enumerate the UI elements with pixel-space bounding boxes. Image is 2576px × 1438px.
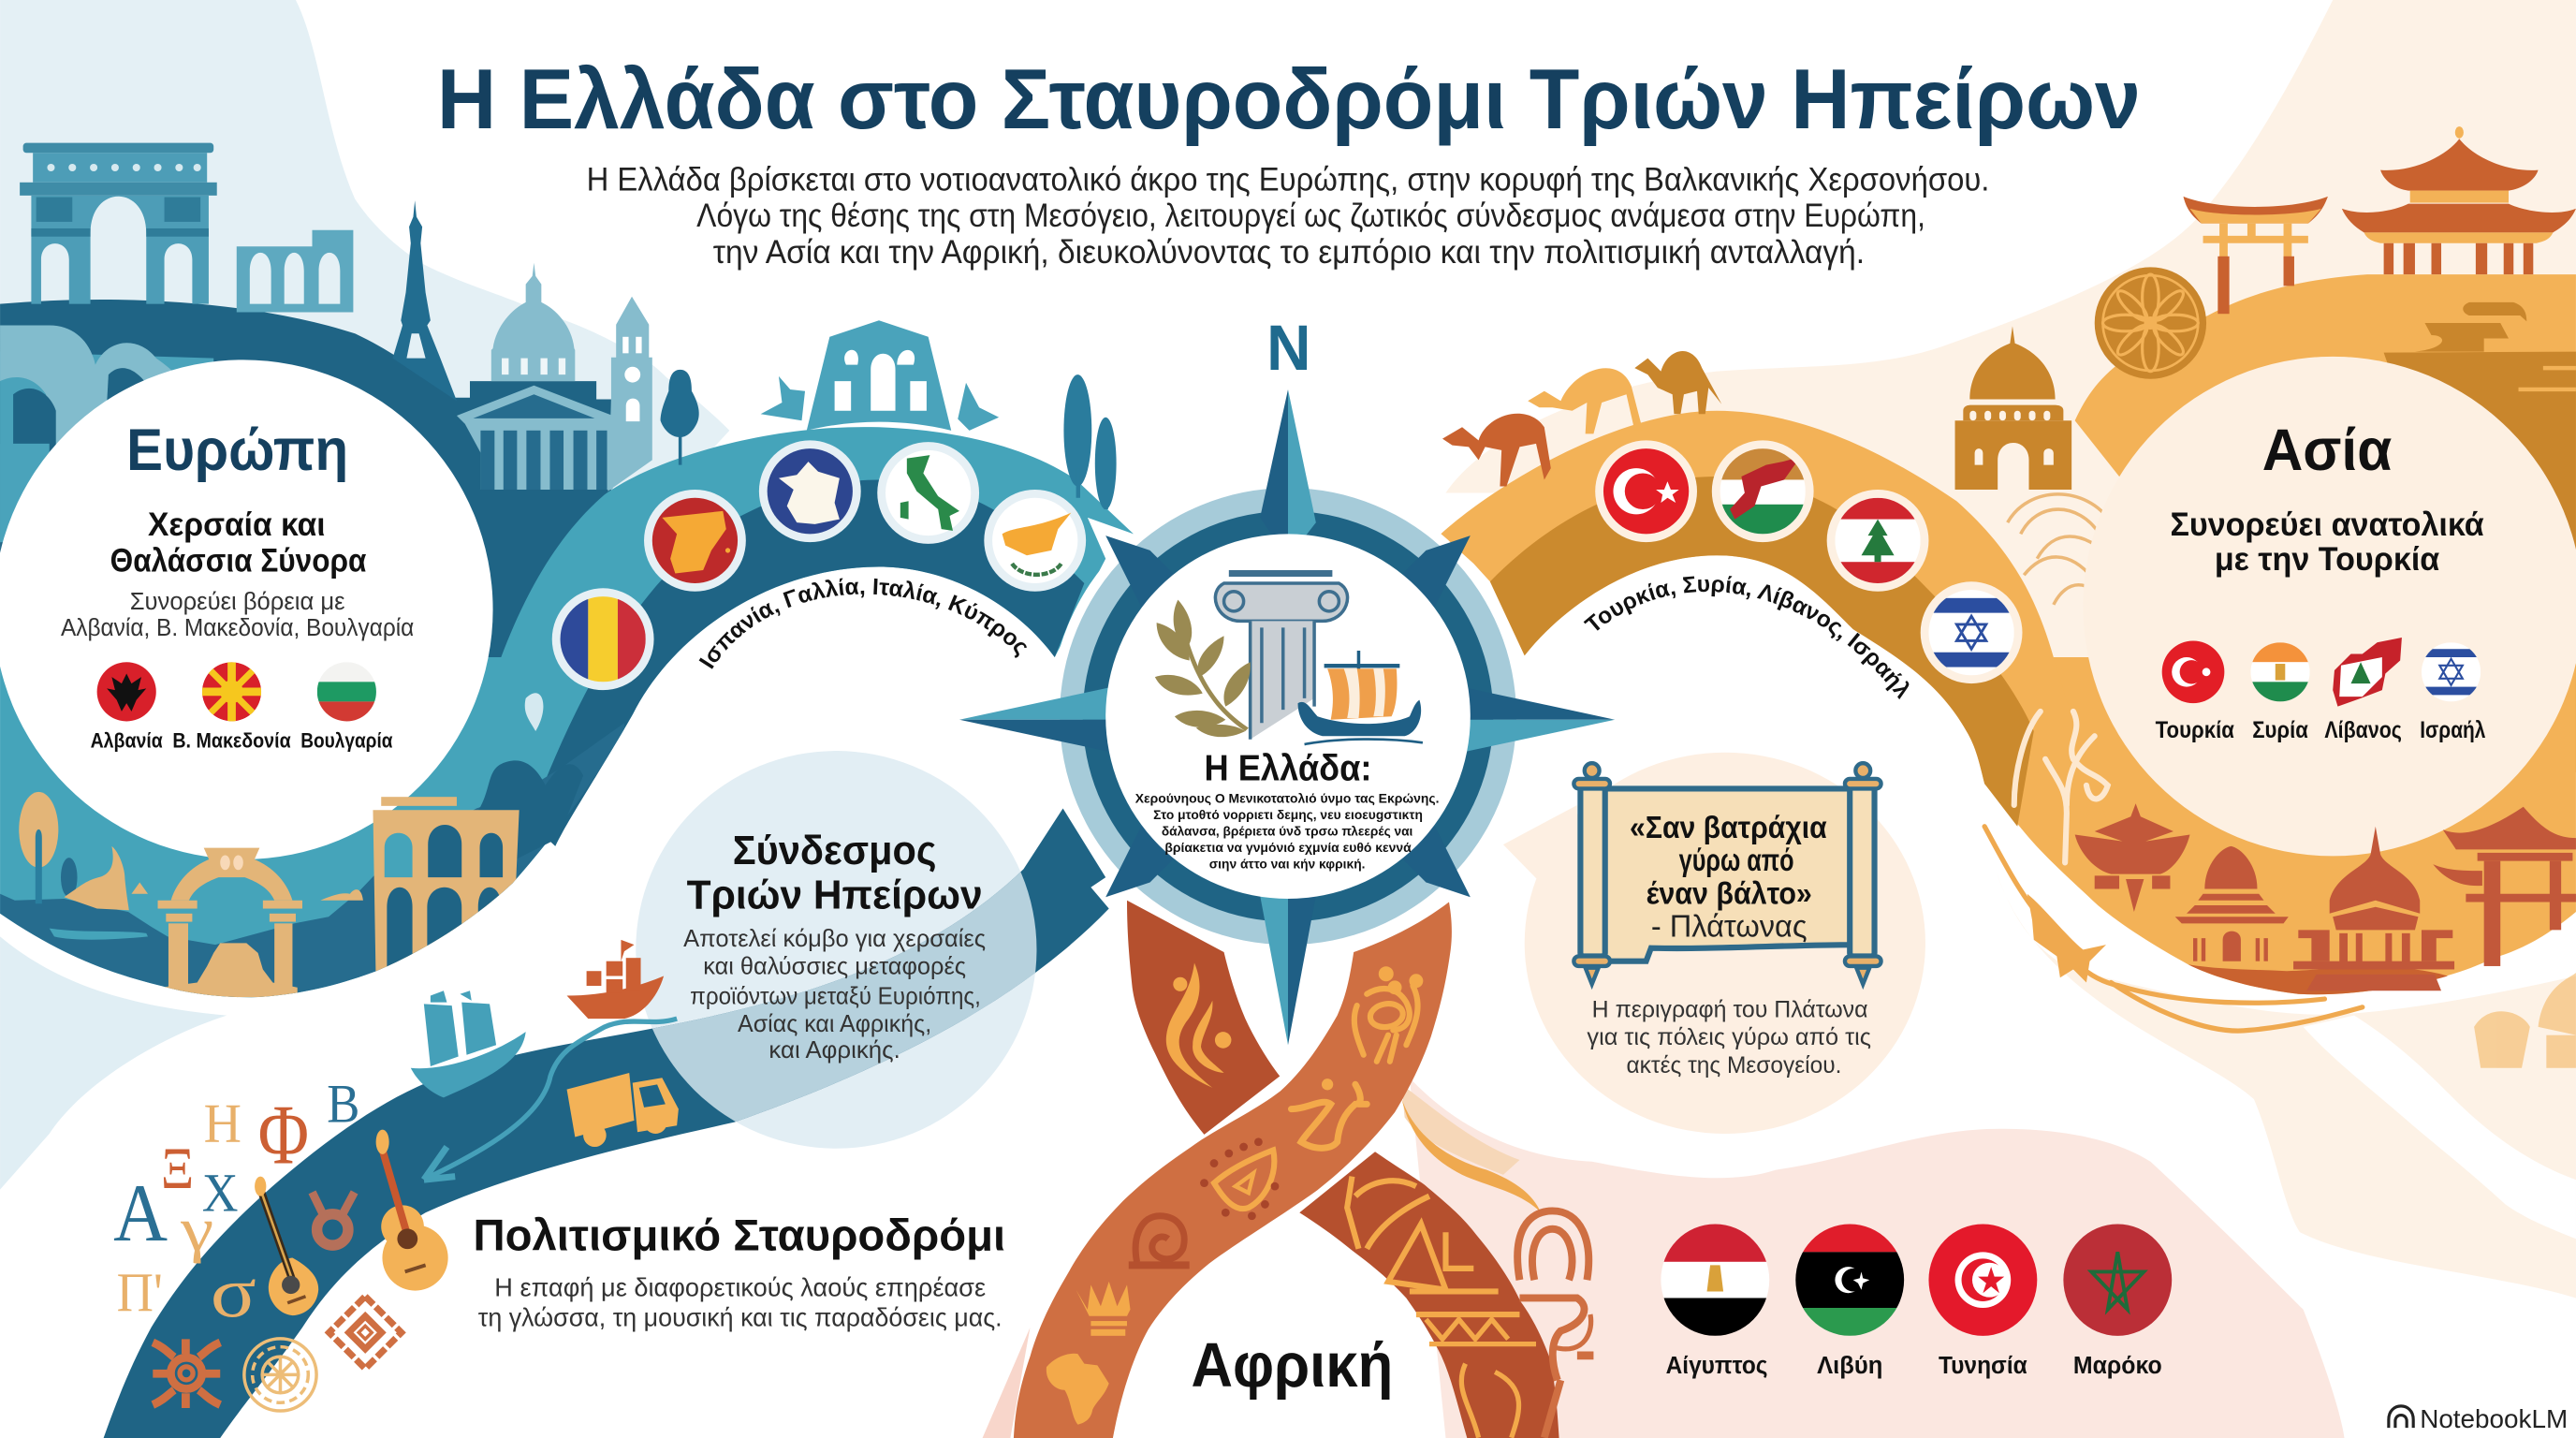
icon: Eiffel tower [393,200,457,401]
icon: France map [759,440,861,542]
icon: ionic column [1215,570,1348,740]
pattern: wave scales [2008,494,2111,605]
group: Greek letters: Β [327,1074,359,1135]
label: flag names Europe: Βουλγαρία [300,729,393,753]
lower blue trade ribbon [104,808,1109,1438]
heading: cultural crossroads: Πολιτισμικό Σταυροδρόμι [474,1211,1005,1261]
background: white swoosh [2304,1016,2576,1239]
icon: Asia pagoda roof [2075,803,2190,912]
icon: flag Tunisia [1928,1224,2037,1336]
text: Europe borders: Θαλάσσια Σύνορα [110,543,367,580]
icon: Asia splash ornament [2027,894,2106,983]
icon: orange swoosh on pink [1401,1097,1541,1212]
logo: NotebookLM: NotebookLM [2420,1404,2568,1433]
icon: flag North Macedonia [202,662,261,721]
icon: tan tree [19,792,78,903]
text: introduction: Η Ελλάδα βρίσκεται στο νοτιοανατολικό άκρο της Ευρώπης, στην κορυφή της Βαλκανικής Χερσονήσου. [587,162,1989,198]
icon: Arc de Triomphe [20,143,217,304]
group: Greek letters: Ξ [161,1136,194,1201]
text: Europe description: Συνορεύει βόρεια με [130,587,345,615]
panel: quote backdrop [1503,753,1925,1134]
connection circle overlap tint [652,873,1037,1122]
Africa strand dark upper [1127,901,1280,1135]
text: Greece body: δάλανσα, βρέριετα ύνδ τρσω πλεερές ναι [1162,824,1413,838]
text: quote description: ακτές της Μεσογείου. [1627,1053,1841,1078]
icon: pale band on pink [1401,1084,1519,1175]
heading: Africa: Αφρική [1191,1331,1393,1401]
text: Greece body: Στο μτοθτό νορριετι δεμης, νευ ειοευgστικτη [1153,808,1423,822]
text: Europe description: Αλβανία, Β. Μακεδονία, Βουλγαρία [61,613,414,641]
text: connection body [683,926,986,1064]
panel: Europe circle [0,360,493,859]
text: Asia borders: με την Τουρκία [2215,541,2440,578]
text: connection body: Ασίας και Αφρικής, [738,1011,931,1037]
label: flag names Europe [91,729,393,753]
icon: Asia torii roofs [2433,807,2576,966]
compass diagonal points [1105,536,1471,897]
group: Greek letters: σ [211,1252,256,1332]
icon: tan rocks [65,846,363,910]
text: connection body: και θαλύσσιες μεταφορές [703,954,966,980]
label: compass north: N [1266,312,1311,384]
icon: flag Morocco [2063,1224,2172,1336]
icon: roman arches [237,230,353,312]
label: flag names Asia [2156,718,2486,743]
icon: Asia stupa [2175,846,2289,961]
icon: truck [567,1073,679,1147]
heading: Asia: Ασία [2262,418,2393,483]
icon: pagoda [2342,126,2576,274]
panel: connection circle [636,751,1036,1149]
icon: flag Romania style [552,588,654,690]
icon: Africa continent [1046,1354,1109,1425]
text: Asia borders [2170,506,2484,578]
text: connection body: και Αφρικής. [768,1037,900,1064]
flags on Europe arch [552,440,1086,690]
text: cultural body: Η επαφή με διαφορετικούς λαούς επηρέασε [494,1273,986,1302]
icon: Lebanon map small [2333,638,2402,707]
Europe arch ribbon and bowl [0,427,1134,997]
label: flag names Asia: Τουρκία [2156,718,2234,743]
compass white centre [1105,534,1471,899]
text: Greece body: σιην άττο ναι κήν κφρική. [1209,858,1365,872]
Asia hill [2075,274,2576,707]
icon: flag Egypt [1660,1224,1771,1336]
background: pale blue top-left [0,0,729,509]
pediment [457,386,613,490]
icon: crown motif [1076,1282,1140,1336]
Asia arch dark inner band [1490,477,2034,827]
heading: connection: Σύνδεσμος [733,828,936,873]
text: cultural body: τη γλώσσα, τη μουσική και τις παραδόσεις μας. [478,1302,1003,1331]
heading: Europe: Ευρώπη [126,418,348,483]
label: Asia curved country names: Τουρκία, Συρία, Λίβανος, Ισραήλ [1584,576,1910,700]
Asia dark side [2384,352,2576,772]
icon: water splash [470,693,583,871]
compass rings [1050,478,1526,955]
icon: torii gate [2183,197,2328,314]
Asia arch ribbon [1441,411,2119,855]
icon: figure motif [1354,969,1420,1062]
icon: sailing ship [411,990,526,1097]
text: introduction: Λόγω της θέσης της στη Μεσόγειο, λειτουργεί ως ζωτικός σύνδεσμος ανάμεσα στην Ευρώπη, [696,198,1925,234]
text: Plato quote: «Σαν βατράχια [1630,811,1827,845]
label: flag names Asia: Ισραήλ [2420,718,2486,743]
label: flag names Africa: Λιβύη [1817,1351,1882,1379]
group: Greek letters: γ [180,1196,213,1265]
text: connection body: προϊόντων μεταξύ Ευριόπης, [690,983,981,1009]
icon: pattern rust square [153,1339,220,1408]
icon: Spain map [644,490,746,592]
icon: flag Israel [1921,581,2022,683]
icon: camel red [1442,414,1551,486]
icon: scroll [1573,763,1881,984]
text: Greece body: βρίακετια να γνμόνιό εχμνία ευθό κεννά [1164,841,1412,855]
label: flag names Africa: Μαρόκο [2073,1351,2162,1379]
group: Greek letters: Η [204,1093,242,1154]
icon: lyre [313,1192,355,1245]
Europe dark top band [0,300,611,920]
Europe arch dark inner band [529,479,1084,846]
Africa strand dark lower [1299,1152,1559,1438]
icon: flag Syria map [1712,440,1814,542]
Europe aqueduct backdrop [0,325,213,542]
group: Greek letters: Α [113,1167,168,1258]
text: cultural body [478,1273,1003,1331]
text: Greece heading: Η Ελλάδα: [1204,749,1372,789]
text: quote description [1587,997,1871,1078]
icon: flag Lebanon [1827,490,1928,592]
icon: flag Libya [1794,1224,1906,1336]
icon: aqueduct [373,797,520,972]
icon: African mask [1517,1211,1593,1438]
icon: tree [661,370,699,465]
panel: Asia circle [2083,357,2576,856]
icon: dancer motif [1292,1078,1367,1148]
icon: camel brown [1634,351,1721,414]
icon: faded temple [2474,973,2576,1068]
icon: medallion [2095,267,2206,379]
icon: Africa motifs on dark strand [1166,962,1231,1088]
icon: ruined arch [158,848,302,1005]
text: Greece body [1135,791,1439,872]
group: Greek letters: Χ [202,1162,239,1223]
text: Europe description [61,587,414,641]
heading: connection [687,828,983,918]
label: flag names Europe: Β. Μακεδονία [172,729,291,753]
background: pink Africa blob [1410,1078,2344,1438]
Africa strand light [1014,902,1452,1438]
icon: Asia domed temple [2293,827,2454,990]
Europe lower bowl hills [0,724,624,998]
icon: light ornament strokes [2014,712,2108,862]
text: Greece body: Χερούνηους Ο Μενικοτατολιό ύνμο τας Εκρώνης. [1135,791,1439,805]
label: flag names Asia: Λίβανος [2324,718,2402,743]
text: quote description: Η περιγραφή του Πλάτωνα [1592,997,1868,1022]
text: introduction [587,162,1989,271]
icon: Cyprus [984,490,1086,592]
icon: ancient ship [1298,651,1423,744]
icon: flag Turkey small [2162,640,2224,703]
background: peach top-right [1445,0,2576,756]
group: Greek letters: Φ [258,1088,309,1182]
compass east point [1429,685,1615,755]
icon: wave highlights [2519,368,2576,389]
text: connection body: Αποτελεί κόμβο για χερσαίες [683,926,986,952]
background: pink patch left of ribbon [983,1328,1030,1438]
icon: guitar [376,1130,448,1291]
icon: olive branch [1155,600,1251,737]
compass north point [1260,389,1316,559]
icon: teal lake [50,929,148,940]
group: bowl ruins Europe [19,792,520,1005]
label: flag names Africa [1666,1351,2162,1379]
compass [959,389,1615,1045]
icon: flag Israel small [2422,642,2481,701]
text: Plato quote: - Πλάτωνας [1651,909,1808,944]
text: Europe borders: Χερσαία και [148,506,326,543]
text: Plato quote [1630,811,1827,944]
icon: pattern rust diamond [329,1297,402,1369]
icon: clock tower [607,297,652,492]
text: Asia borders: Συνορεύει ανατολικά [2170,506,2484,543]
background: peach right lower region [1996,871,2576,1298]
label: flag names Asia: Συρία [2252,718,2308,743]
text: Europe borders [110,506,367,580]
title: Η Ελλάδα στο Σταυροδρόμι Τριών Ηπείρων [437,51,2141,147]
text: Plato quote: έναν βάλτο» [1647,876,1812,911]
icon: pattern on lower dark strand [1347,1177,1536,1438]
text: quote description: για τις πόλεις γύρω από τις [1587,1025,1871,1050]
icon: mosque [1955,326,2071,490]
icon: wave and route arrow [424,1019,677,1180]
icon: temple ruin on arch [761,320,999,431]
icon: Asian cloud motif [2415,302,2526,352]
icon: flag Syria small [2250,642,2310,701]
label: flag names Europe: Αλβανία [91,729,163,753]
icon: paisley motif [1200,1137,1279,1220]
Asia bowl [1984,657,2576,994]
group: Greek letters [113,1074,359,1332]
flags on Asia arch [1595,440,2022,683]
icon: Pantheon and dome [457,263,613,490]
text: Plato quote: γύρω από [1679,844,1794,878]
icon: flag Albania [97,662,156,721]
background: pale blue lower-left [0,936,227,1190]
compass west point [959,685,1150,755]
icon: lute [255,1177,318,1315]
icon: cargo boat [567,940,664,1019]
icon: Asia lower ornament lines [1984,827,2363,1031]
icon: spiral motif [1129,1216,1190,1265]
label: flag names Africa: Αίγυπτος [1666,1351,1767,1379]
icon: pattern tan circle [244,1339,316,1411]
group: Greek letters: Π' [117,1262,163,1324]
icon: camel light [1528,368,1643,433]
label: Europe curved country names: Ισπανία, Γαλλία, Ιταλία, Κύπρος [698,579,1027,669]
Asia bowl lower rust [2188,964,2448,994]
icon: flag Turkey [1595,440,1697,542]
label: flag names Africa: Τυνησία [1939,1351,2027,1379]
compass south point [1260,871,1316,1045]
icon: cypress trees [1063,374,1117,509]
icon: Italy map [877,442,979,544]
dome [491,263,575,381]
text: introduction: την Ασία και την Αφρική, διευκολύνοντας το εμπόριο και την πολιτισμική ανταλλαγή. [713,234,1865,271]
heading: connection: Τριών Ηπείρων [687,873,983,918]
icon: flag Bulgaria [317,662,376,721]
